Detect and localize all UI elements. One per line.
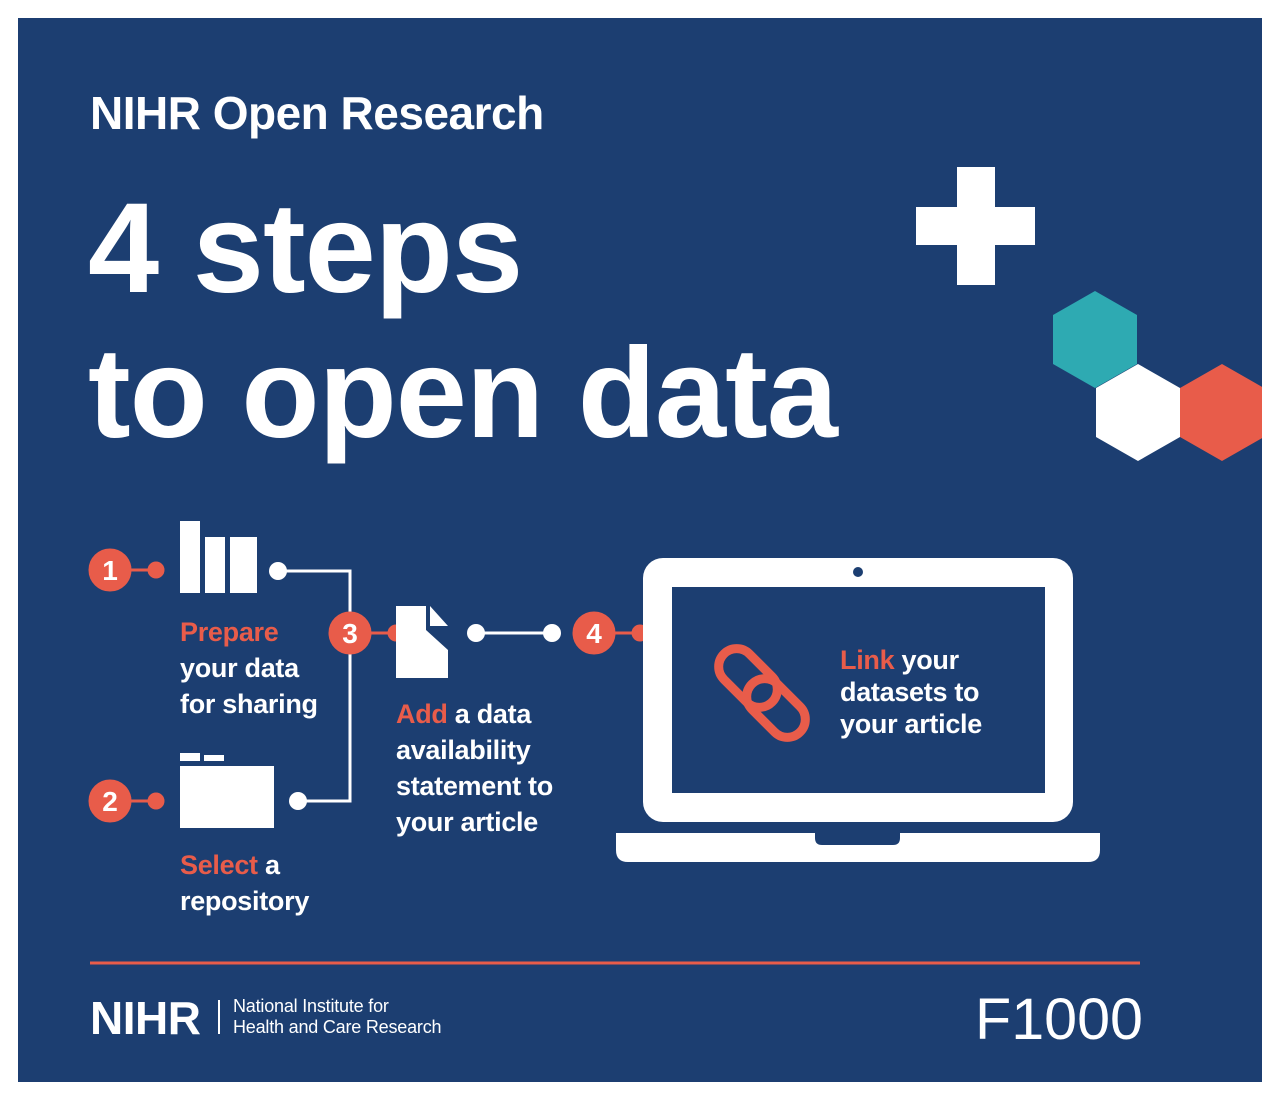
number badges xyxy=(90,550,647,821)
text: step 4 xyxy=(840,645,982,739)
icon: document xyxy=(396,606,448,678)
text: step 3: Add a data xyxy=(396,699,531,729)
footer divider xyxy=(90,962,1140,964)
hexagons xyxy=(1053,291,1264,461)
text: step 1: for sharing xyxy=(180,689,318,719)
icon: plus xyxy=(916,167,1035,285)
text: step 4: datasets to xyxy=(840,677,979,707)
title: 4 steps xyxy=(88,177,522,320)
subtitle: NIHR Open Research xyxy=(90,87,544,139)
logo: NIHR: Health and Care Research xyxy=(233,1017,441,1037)
text: step 3: your article xyxy=(396,807,538,837)
text: step 2: repository xyxy=(180,886,309,916)
icon: bar chart xyxy=(180,521,257,593)
text: step 3: statement to xyxy=(396,771,553,801)
text: step 3 xyxy=(396,699,553,837)
text: step 1: Prepare xyxy=(180,617,278,647)
icon: folder xyxy=(180,753,274,828)
title: to open data xyxy=(88,322,837,465)
decorative shapes: 1 xyxy=(102,555,118,586)
logo: NIHR: NIHR xyxy=(90,992,200,1044)
decorative shapes: 4 xyxy=(586,618,602,649)
text: step 2: Select a xyxy=(180,850,280,880)
text: step 4: Link your xyxy=(840,645,959,675)
connector lines xyxy=(278,571,552,801)
title xyxy=(88,177,839,465)
decorative shapes: 2 xyxy=(102,786,118,817)
text: step 2 xyxy=(180,850,310,916)
decorative shapes: 3 xyxy=(342,618,358,649)
text: step 1: your data xyxy=(180,653,299,683)
text: step 1 xyxy=(180,617,318,719)
text: step 3: availability xyxy=(396,735,530,765)
logo: NIHR xyxy=(90,992,441,1044)
laptop xyxy=(616,558,1100,862)
logo: NIHR: National Institute for xyxy=(233,996,389,1016)
text: step 4: your article xyxy=(840,709,982,739)
icon: chain link xyxy=(711,641,813,745)
logo: F1000: F1000 xyxy=(975,987,1143,1052)
